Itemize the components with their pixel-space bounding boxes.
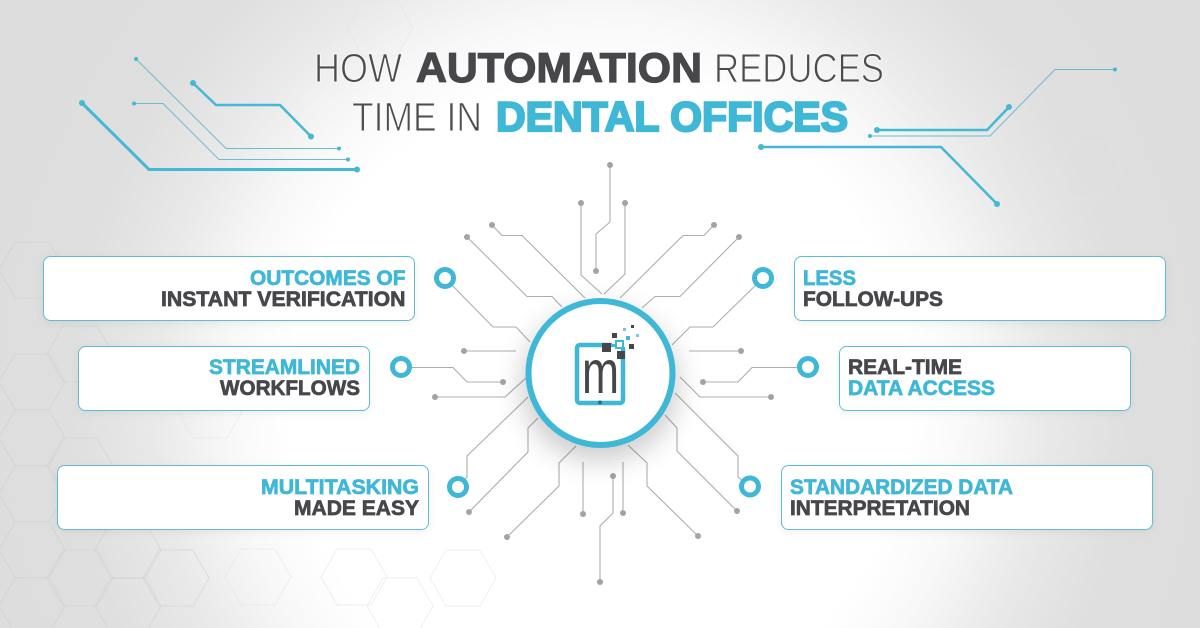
card: streamlined workflows: STREAMLINED	[209, 356, 360, 379]
card: multitasking made easy: MULTITASKING	[261, 476, 419, 499]
card: real-time data access: DATA ACCESS	[848, 377, 995, 400]
card: real-time data access: REAL-TIME	[848, 356, 962, 379]
card: standardized data interpretation: INTERPRETATION	[790, 497, 970, 520]
card: streamlined workflows	[78, 346, 370, 410]
ring connectors	[392, 270, 816, 496]
title: AUTOMATION	[416, 44, 702, 91]
hub circle with logo	[528, 301, 672, 445]
card: less follow-ups: LESS	[803, 267, 856, 290]
title: DENTAL OFFICES	[496, 93, 848, 140]
circuit lines around the hub	[401, 162, 808, 585]
title: REDUCES	[714, 45, 884, 91]
card: streamlined workflows: WORKFLOWS	[220, 377, 360, 400]
hub shadow	[522, 309, 678, 461]
title: HOW	[314, 45, 402, 91]
title	[314, 44, 884, 140]
card: real-time data access	[840, 346, 1130, 410]
card: less follow-ups: FOLLOW-UPS	[803, 288, 943, 311]
circuit: top right	[758, 68, 1117, 207]
circuit: top left	[79, 57, 360, 172]
card: multitasking made easy	[58, 466, 428, 530]
card: multitasking made easy: MADE EASY	[294, 497, 419, 520]
card: outcomes of instant verification	[44, 256, 414, 320]
card: standardized data interpretation	[782, 466, 1152, 530]
card: outcomes of instant verification: OUTCOMES OF	[250, 267, 406, 290]
card: outcomes of instant verification: INSTANT VERIFICATION	[161, 288, 406, 311]
title: TIME IN	[352, 94, 482, 140]
card: standardized data interpretation: STANDARDIZED DATA	[790, 476, 1013, 499]
icon: tablet logo: m	[582, 338, 619, 406]
card: less follow-ups	[794, 256, 1166, 320]
icon: tablet logo	[577, 325, 639, 406]
